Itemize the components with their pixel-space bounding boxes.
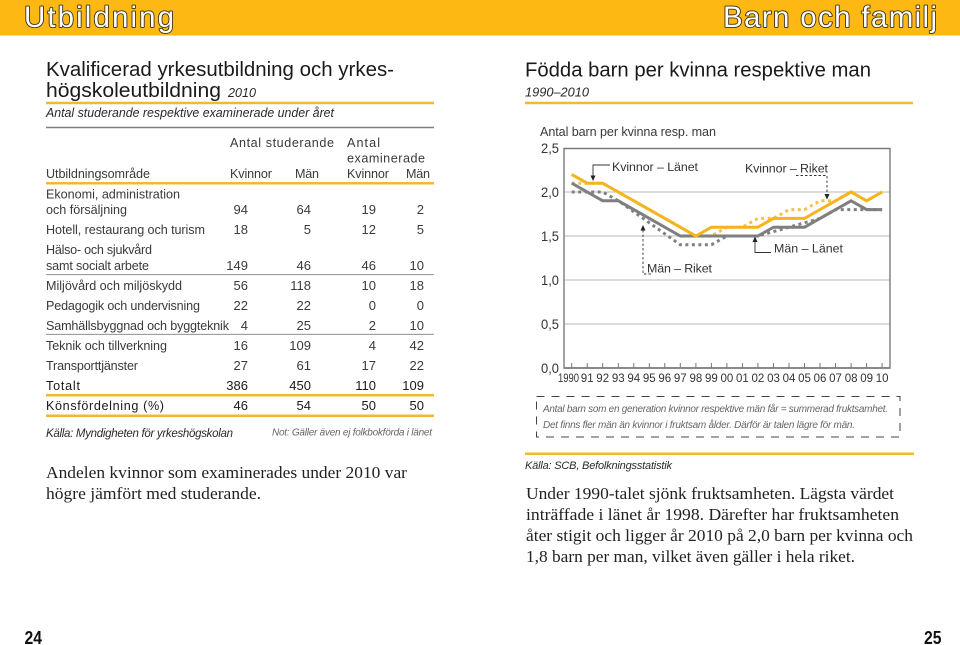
table rows: 16 <box>234 338 248 353</box>
table rows: 4 <box>369 338 376 353</box>
y axis labels: 1,5 <box>541 228 559 244</box>
table rows: Pedagogik och undervisning <box>46 299 200 313</box>
y axis labels: 0,5 <box>541 316 559 332</box>
series: Kvinnor Länet <box>572 174 882 236</box>
table rows: 22 <box>234 298 248 313</box>
x axis labels: 00 <box>721 373 733 385</box>
table totals: Könsfördelning (%) <box>46 399 164 413</box>
dashed note box: Antal barn som en generation kvinnor respektive män får = summerad fruktsamhet. <box>542 403 888 415</box>
table rows: Samhällsbyggnad och byggteknik <box>46 319 230 333</box>
y axis labels: 1,0 <box>541 272 559 288</box>
y axis labels: 2,0 <box>541 184 559 200</box>
line chart <box>540 125 890 385</box>
label: Män Länet <box>752 236 844 256</box>
table rows: 2 <box>417 202 424 217</box>
left heading: Antal studerande respektive examinerade under året <box>45 105 335 120</box>
y axis title: Antal barn per kvinna resp. man <box>540 125 716 139</box>
table totals: 50 <box>362 398 376 413</box>
table header: Män <box>406 167 430 181</box>
x axis labels: 08 <box>845 373 857 385</box>
x axis labels: 93 <box>612 373 625 385</box>
table rows: och försäljning <box>46 203 127 217</box>
x axis labels: 03 <box>767 373 780 385</box>
x axis labels: 99 <box>705 373 718 385</box>
x axis labels: 92 <box>596 373 609 385</box>
conclusion text left: högre jämfört med studerande. <box>46 484 261 503</box>
x axis labels: 07 <box>829 373 842 385</box>
table totals <box>46 378 434 416</box>
table totals: 450 <box>289 378 311 393</box>
label: Män Riket <box>640 225 713 276</box>
conclusion text right <box>526 484 914 566</box>
table rows: 56 <box>234 278 248 293</box>
x axis labels: 09 <box>860 373 873 385</box>
table rows: 0 <box>369 298 376 313</box>
table header: Män <box>295 167 319 181</box>
table rows: 46 <box>362 258 376 273</box>
table rows: samt socialt arbete <box>46 259 149 273</box>
right heading <box>525 60 913 103</box>
table rows: Teknik och tillverkning <box>46 339 167 353</box>
source right: Källa: SCB, Befolkningsstatistik <box>525 460 672 472</box>
table rows: 109 <box>289 338 311 353</box>
table rows: 5 <box>417 222 424 237</box>
x axis labels: 91 <box>581 373 594 385</box>
table rows <box>46 188 434 373</box>
table rows: 18 <box>410 278 424 293</box>
x axis labels: 05 <box>798 373 811 385</box>
table rows: Ekonomi, administration <box>46 188 180 202</box>
header band <box>0 0 960 36</box>
y axis labels: 0,0 <box>541 360 559 376</box>
table rows: 10 <box>362 278 376 293</box>
grid lines <box>564 192 890 324</box>
table rows: Hotell, restaurang och turism <box>46 223 205 237</box>
dashed note box: Det finns fler män än kvinnor i fruktsam ålder. Därför är talen lägre för män. <box>543 419 855 431</box>
table rows: 22 <box>297 298 311 313</box>
table rows: 27 <box>234 358 248 373</box>
x axis labels: 04 <box>783 373 796 385</box>
right heading: 1990–2010 <box>525 84 590 100</box>
table rows: 2 <box>369 318 376 333</box>
label: Kvinnor Länet: Kvinnor – Länet <box>612 160 699 174</box>
table totals: 46 <box>234 398 248 413</box>
series: Kvinnor Riket <box>572 183 882 236</box>
table totals: 54 <box>297 398 311 413</box>
label: Kvinnor Riket: Kvinnor – Riket <box>745 162 829 176</box>
table header: Kvinnor <box>230 167 272 181</box>
table totals: 109 <box>402 378 424 393</box>
table header: Antal <box>347 136 380 150</box>
x axis labels: 98 <box>690 373 702 385</box>
table header: Kvinnor <box>347 167 389 181</box>
table rows: 10 <box>410 318 424 333</box>
x axis labels: 10 <box>876 373 888 385</box>
x axis labels: 01 <box>736 373 749 385</box>
table totals: 110 <box>355 378 376 393</box>
conclusion text right: Under 1990-talet sjönk fruktsamheten. Lägsta värdet <box>526 484 894 503</box>
table rows: 42 <box>410 338 424 353</box>
table rows: 64 <box>297 202 311 217</box>
table rows: 61 <box>297 358 311 373</box>
dashed note box <box>536 396 900 437</box>
x axis ticks <box>572 363 882 368</box>
series: Män Länet <box>572 183 882 236</box>
conclusion text left: Andelen kvinnor som examinerades under 2010 var <box>46 463 407 482</box>
source left: Källa: Myndigheten för yrkeshögskolan <box>46 428 233 440</box>
table header <box>46 136 430 181</box>
table rows: 46 <box>297 258 311 273</box>
label: Män Riket: Män – Riket <box>647 262 713 276</box>
section title right: Barn och familj <box>723 1 937 34</box>
y axis labels <box>541 140 559 376</box>
left heading <box>45 59 434 120</box>
table rows: Miljövård och miljöskydd <box>46 279 182 293</box>
chart frame <box>564 148 890 368</box>
x axis labels: 95 <box>643 373 656 385</box>
table totals: 386 <box>226 378 248 393</box>
left heading: högskoleutbildning <box>46 80 221 102</box>
label: Män Länet: Män – Länet <box>774 242 844 256</box>
table header: Utbildningsområde <box>46 167 150 181</box>
conclusion text right: 1,8 barn per man, vilket även gäller i hela riket. <box>526 547 855 566</box>
table totals: Totalt <box>46 379 80 393</box>
left heading: 2010 <box>227 85 257 100</box>
table rows: Transporttjänster <box>46 359 138 373</box>
x axis labels: 97 <box>674 373 687 385</box>
table rows: 22 <box>410 358 424 373</box>
section title left: Utbildning <box>24 1 174 34</box>
table rows: 10 <box>410 258 424 273</box>
left heading: Kvalificerad yrkesutbildning och yrkes- <box>46 59 394 81</box>
table rows: 0 <box>417 298 424 313</box>
x axis labels: 1990 <box>558 373 579 385</box>
table rows: 12 <box>362 222 376 237</box>
table rows: 94 <box>234 202 248 217</box>
table rows: Hälso- och sjukvård <box>46 243 152 257</box>
table rows: 149 <box>226 258 248 273</box>
x axis labels: 94 <box>627 373 641 385</box>
table rows: 17 <box>362 358 376 373</box>
conclusion text right: åter stigit och ligger år 2010 på 2,0 barn per kvinna och <box>526 526 914 545</box>
note left: Not: Gäller även ej folkbokförda i länet <box>272 428 433 438</box>
table rows: 25 <box>297 318 311 333</box>
table rows: 5 <box>304 222 311 237</box>
table header: examinerade <box>347 152 425 166</box>
x axis labels: 96 <box>658 373 671 385</box>
table <box>46 128 434 416</box>
x axis labels: 06 <box>814 373 826 385</box>
label: Kvinnor Riket <box>745 162 830 200</box>
table totals: 50 <box>410 398 424 413</box>
x axis labels: 02 <box>752 373 764 385</box>
conclusion text right: inträffade i länet år 1998. Därefter har fruktsamheten <box>526 505 900 524</box>
label: Kvinnor Länet <box>590 160 699 181</box>
table rows: 19 <box>362 202 376 217</box>
conclusion text left <box>46 463 407 503</box>
y axis labels: 2,5 <box>541 140 559 156</box>
table rows: 18 <box>234 222 248 237</box>
table rows: 118 <box>290 278 311 293</box>
table rows: 4 <box>241 318 248 333</box>
series: Män Riket <box>572 192 882 245</box>
right heading: Födda barn per kvinna respektive man <box>525 60 871 82</box>
table header: Antal studerande <box>230 136 334 150</box>
x axis labels <box>558 373 888 385</box>
